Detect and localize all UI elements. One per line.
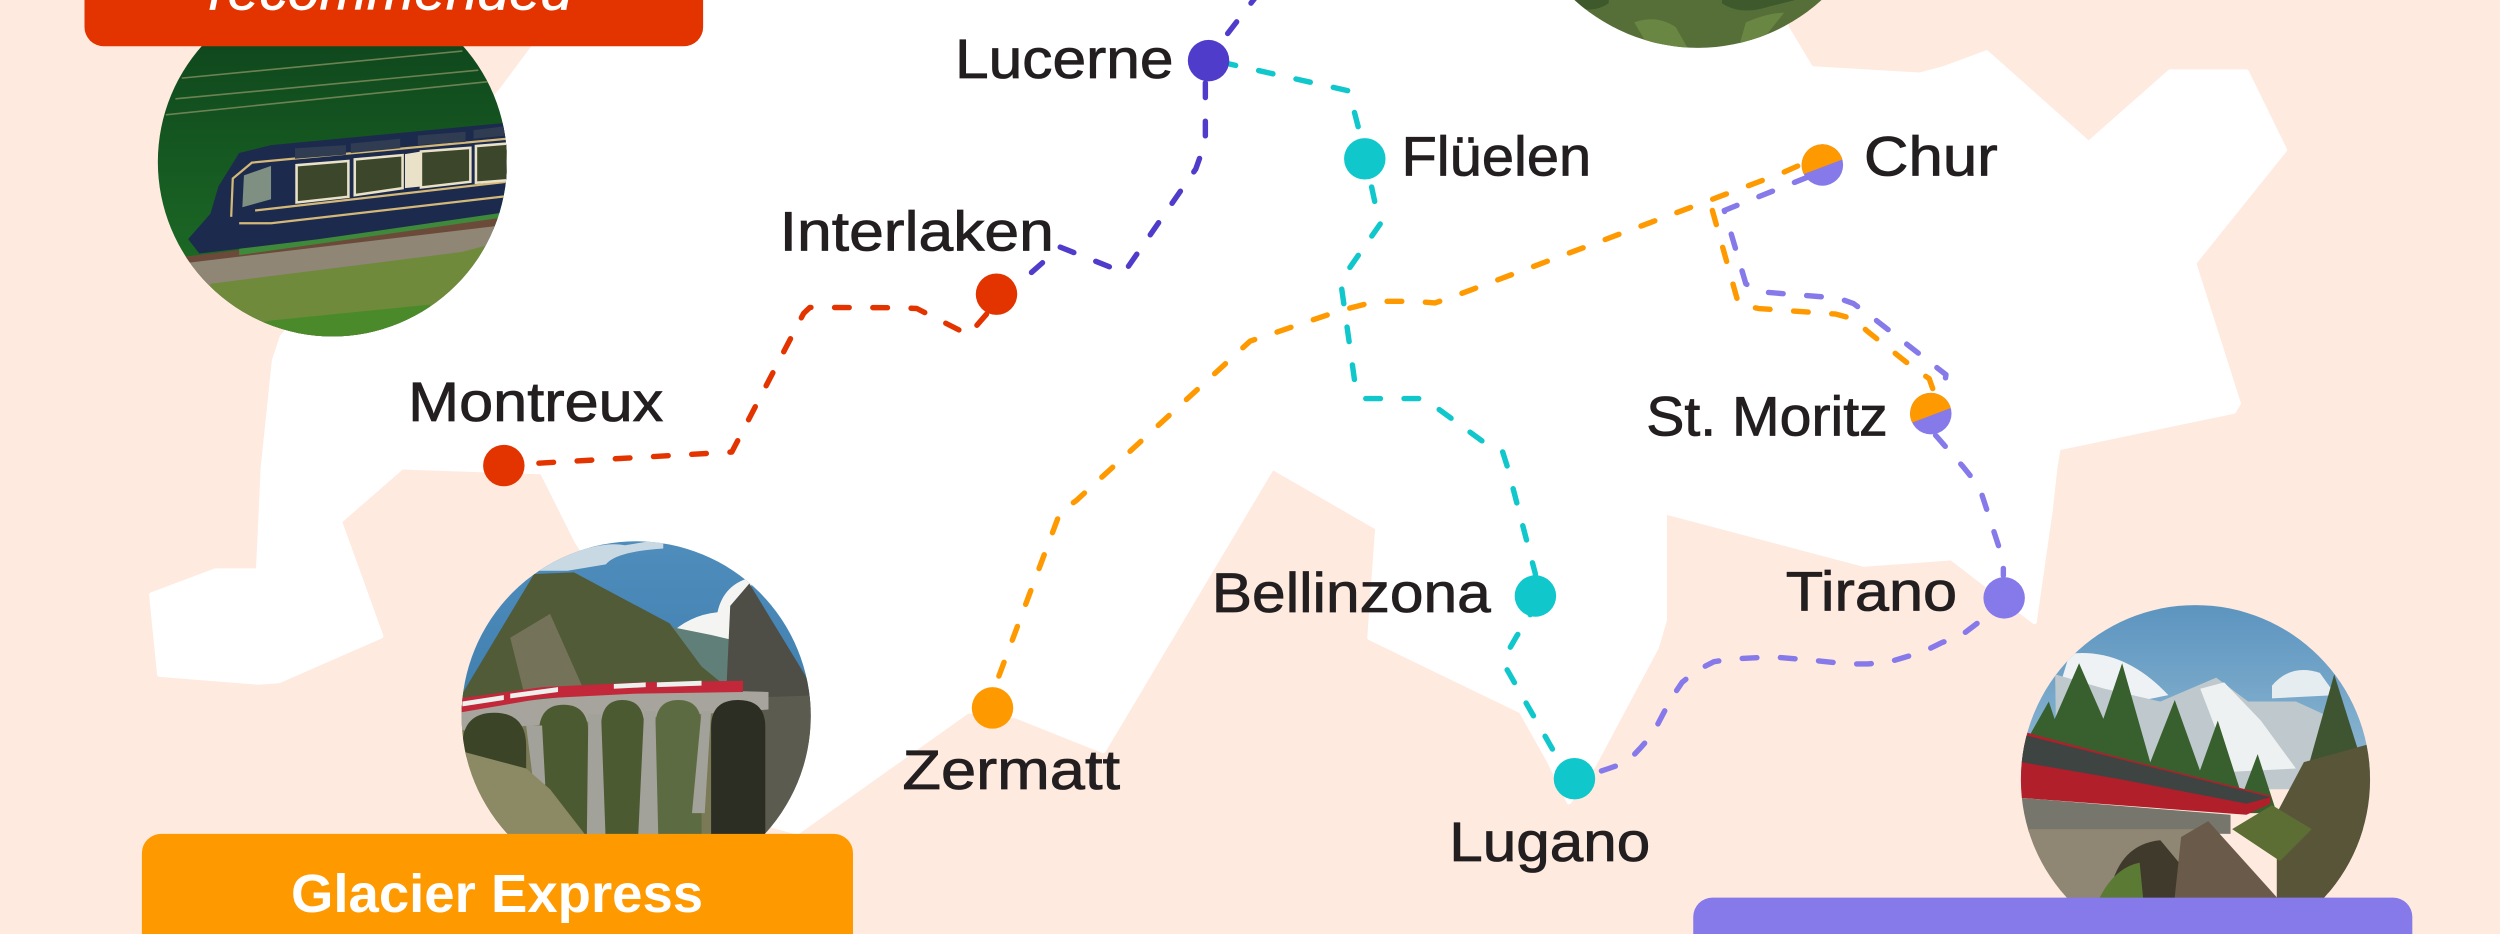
photo: foliage at top [1574,0,1822,48]
photo: Golden Pass train [158,46,507,336]
stop: Montreux [408,370,663,486]
route: purple Chur to St. Moritz [1724,177,1946,413]
route: orange [999,165,1800,676]
red carriage [2012,729,2270,815]
stone bridge [2012,797,2231,834]
route: teal [1221,62,1555,754]
photo: Landwasser viaduct [462,541,811,834]
route: purple St. Moritz to Tirano [1936,435,2003,576]
train [459,681,743,713]
viaduct arches [462,700,765,848]
trees [2022,663,2277,813]
stop: Lucerne: Lucerne [955,27,1173,90]
route: purple Tirano to Lugano [1594,623,1977,773]
stop: Chur [1802,124,1998,187]
route: red [539,307,989,463]
banner: Glacier Express [142,834,853,934]
stop: Zermatt: Zermatt [902,738,1121,801]
route: indigo north [1228,0,1260,33]
route: orange branch [1712,210,1934,392]
photo: Bernina train [2020,605,2370,898]
stop: Tirano [1786,560,2025,623]
stop: Montreux: Montreux [408,370,663,433]
banner: Glacier Express: Glacier Express [291,864,703,924]
stop: Lugano [1449,758,1650,873]
stop: Interlaken: Interlaken [780,199,1054,262]
stop: Zermatt [902,687,1121,801]
viaduct piers [526,711,711,845]
stop: Flüelen: Flüelen [1401,124,1591,187]
train windows [297,143,508,202]
stop: Chur: Chur [1864,124,1998,187]
stop: Lugano: Lugano [1449,810,1650,873]
map of Switzerland [151,0,2285,832]
banner: purple [1693,898,2412,934]
stop: Interlaken [780,199,1054,315]
route: indigo [1028,83,1205,275]
stop: Bellinzona: Bellinzona [1212,561,1492,624]
stop: St. Moritz: St. Moritz [1646,384,1888,447]
banner: red [85,0,703,46]
stop: Tirano: Tirano [1786,560,1957,623]
